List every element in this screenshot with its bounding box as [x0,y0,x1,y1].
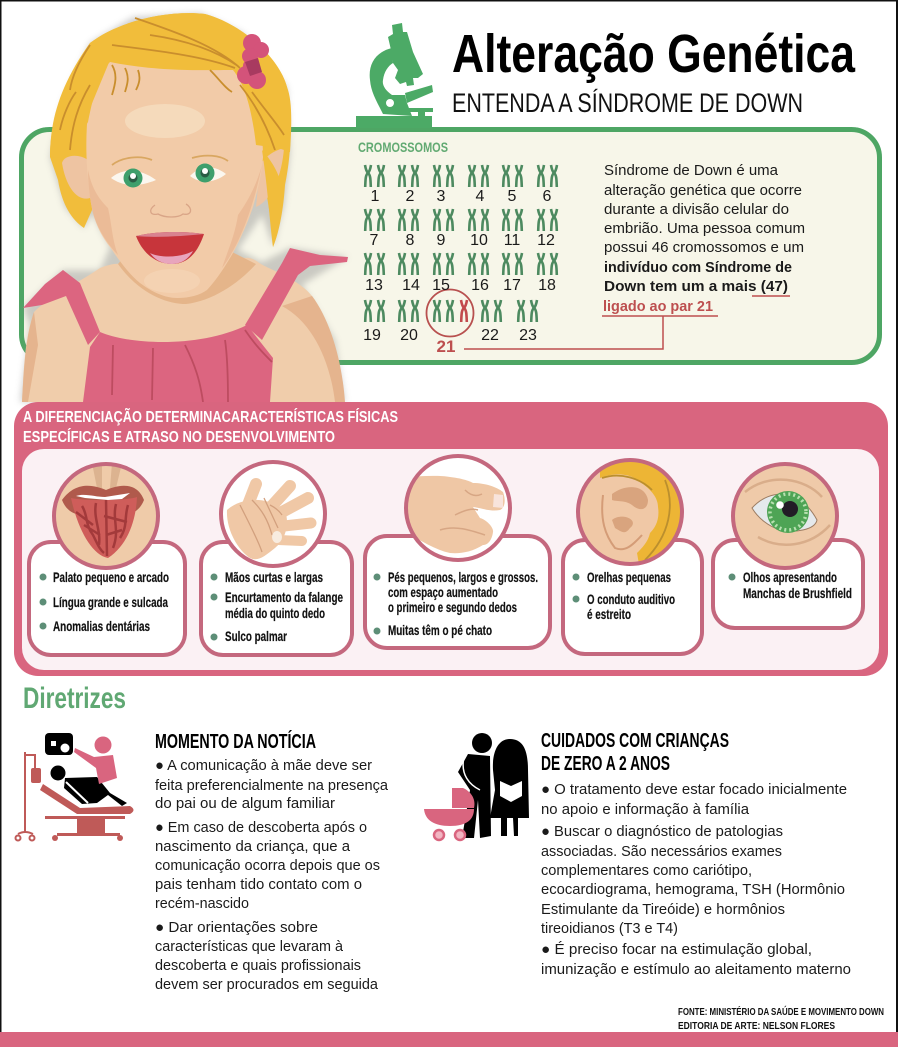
bullet list: imunização e estímulo ao aleitamento materno [541,961,851,978]
circle around pair 21 [426,290,474,336]
section heading: CUIDADOS COM CRIANÇAS [541,730,729,752]
bullet list: nascimento da criança, que a [155,838,351,855]
father [458,733,492,838]
bullet list: do pai ou de algum familiar [155,795,335,812]
chromosome numbers: 9 [437,232,446,249]
bullet list: comunicação ocorra depois que os [155,857,380,874]
panel heading: ESPECÍFICAS E ATRASO NO DESENVOLVIMENTO [23,429,335,446]
card: hands: média do quinto dedo [225,605,325,621]
nose [151,204,191,217]
chromosome numbers: 12 [537,232,555,249]
left ear [62,156,90,199]
IV stand [16,752,35,840]
bullet list: complementares como cariótipo, [541,862,752,879]
chromosome numbers: 10 [470,232,488,249]
card: mouth: Língua grande e sulcada [53,594,168,610]
bullet list: associadas. São necessários exames [541,843,782,860]
footer bar [0,1032,898,1047]
icon: hospital bed scene [16,733,134,841]
chromosome numbers: 6 [543,188,552,205]
eyebrows [112,156,228,165]
row 3 [365,253,557,275]
bullet list: ● É preciso focar na estimulação global, [541,941,812,958]
right eye [190,164,226,182]
bullet list: ecocardiograma, hemograma, TSH (Hormônio [541,881,845,898]
section: momento da notícia [155,730,389,993]
card: feet: com espaço aumentado [388,584,498,600]
text block: explanation: durante a divisão celular do [604,201,789,218]
card: feet: Muitas têm o pé chato [388,622,492,638]
panel: physical characteristics [14,402,888,676]
source credits [678,1005,884,1032]
left eye [111,168,156,188]
body [22,258,344,402]
hair front [50,13,291,158]
hair back [50,13,291,247]
chromosome numbers: 5 [508,188,517,205]
soft shadow [20,13,348,402]
IV bag [31,768,41,783]
bullet list: recém-nascido [155,895,249,912]
card: eyes [713,540,863,628]
illustration: baby [20,13,348,402]
card: feet: o primeiro e segundo dedos [388,599,517,615]
text block: explanation: Síndrome de Down é uma [604,162,779,179]
card: mouth: Palato pequeno e arcado [53,569,169,585]
arm shading [22,296,345,402]
bullet list [155,757,389,993]
subtitle: ENTENDA A SÍNDROME DE DOWN [452,88,803,118]
hair strands [60,18,284,150]
icon: ear [578,455,690,570]
dress [83,325,273,402]
chromosome numbers: 11 [504,232,520,249]
panel heading: A DIFERENCIAÇÃO DETERMINACARACTERÍSTICAS FÍSICAS [23,408,398,426]
card: hands: Sulco palmar [225,628,287,644]
neck shadow [118,252,256,304]
bullet list: devem ser procurados em seguida [155,976,379,993]
chromosome numbers: 13 [365,277,383,294]
mother [490,739,529,836]
text block: explanation: ligado ao par 21 [603,298,713,315]
bullet list: tireoidianos (T3 e T4) [541,920,678,937]
card: hands: Encurtamento da falange [225,589,343,605]
card: mouth: Anomalias dentárias [53,618,150,634]
hair flower [237,34,269,89]
text block: explanation: possui 46 cromossomos e um [604,239,804,256]
bullet list: ● O tratamento deve estar focado inicialmente [541,781,847,798]
baby in arms [500,781,522,802]
text block: explanation: alteração genética que ocorre [604,182,802,199]
text block: explanation: embrião. Uma pessoa comum [604,220,805,237]
card: ears: Orelhas pequenas [587,569,671,585]
chromosome numbers: 7 [370,232,379,249]
forehead highlight [125,104,205,138]
doctor [74,736,117,784]
panel heading [23,408,398,446]
extra chromosome 21 [461,300,467,322]
card: ears: é estreito [587,606,631,622]
chromosome numbers: 4 [476,188,485,205]
lower face highlight [144,269,200,293]
left strap and bow [23,270,100,345]
bullet list [541,781,851,978]
icon: family with stroller [424,733,529,840]
chromosome numbers: 15 [432,277,450,294]
bullet list: pais tenham tido contato com o [155,876,362,893]
section heading: DE ZERO A 2 ANOS [541,753,670,775]
chromosome numbers: 1 [371,188,380,205]
chromosome numbers: 16 [471,277,489,294]
icon: foot [405,456,510,560]
face [86,60,263,298]
heading: diretrizes: Diretrizes [23,682,126,715]
row 4 [365,300,537,322]
cheek shading [88,165,262,268]
chromosome numbers: 19 [363,327,381,344]
section: cuidados com crianças [541,730,851,978]
text block: explanation: Down tem um a mais (47) [604,278,788,295]
bullet list: feita preferencialmente na presença [155,777,389,794]
chromosome numbers: 8 [406,232,415,249]
chromosome numbers: 3 [437,188,446,205]
card: eyes: Manchas de Brushfield [743,585,852,601]
chromosome numbers: 14 [402,277,420,294]
card: hands [201,542,352,655]
right ear [256,148,284,207]
section heading: MOMENTO DA NOTÍCIA [155,730,316,753]
text block: explanation: indivíduo com Síndrome de [604,259,792,276]
card: hands: Mãos curtas e largas [225,569,323,585]
bullet list: ● Dar orientações sobre [155,919,318,936]
chromosome numbers: 2 [406,188,415,205]
chromosome numbers: 22 [481,327,499,344]
text block: explanation [603,162,805,315]
side strand right [262,150,283,247]
mouth [136,232,204,264]
row 2 [365,209,557,231]
section heading [541,730,729,775]
right strap and bow [245,248,348,340]
inner panel [22,449,879,670]
source credits: EDITORIA DE ARTE: NELSON FLORES [678,1020,835,1032]
bullet list: no apoio e informação à família [541,801,750,818]
bullet list: ● Em caso de descoberta após o [155,819,367,836]
chromosome numbers: 18 [538,277,556,294]
chromosome numbers: 23 [519,327,537,344]
card: ears [563,540,702,654]
bed [40,784,134,841]
icon: hand [221,462,325,566]
bullet list: ● A comunicação à mãe deve ser [155,757,372,774]
icon: tongue [54,463,158,568]
chromosome numbers [363,188,556,344]
label: cromossomos: CROMOSSOMOS [358,139,448,155]
card: feet: Pés pequenos, largos e grossos. [388,569,538,585]
number 21: 21 [437,337,455,356]
bullet list: descoberta e quais profissionais [155,957,361,974]
bullet list: características que levaram à [155,938,344,955]
connector line [464,296,790,349]
chromosome numbers: 17 [503,277,521,294]
dress folds [112,330,272,402]
stroller [424,788,475,840]
chromosome grid [358,139,557,356]
patient [50,766,127,806]
card: mouth [29,542,185,655]
icon: eye [733,464,837,568]
chromosome numbers: 20 [400,327,418,344]
panel: chromosomes and explanation [22,130,880,362]
card: ears: O conduto auditivo [587,591,675,607]
bullet list: ● Buscar o diagnóstico de patologias [541,823,783,840]
card: eyes: Olhos apresentando [743,569,837,585]
icon: microscope [356,23,433,128]
tablet [45,733,73,755]
card: feet [365,536,550,648]
row 1 [365,165,557,187]
bullet list: Estimulante da Tireóide) e hormônios [541,901,785,918]
